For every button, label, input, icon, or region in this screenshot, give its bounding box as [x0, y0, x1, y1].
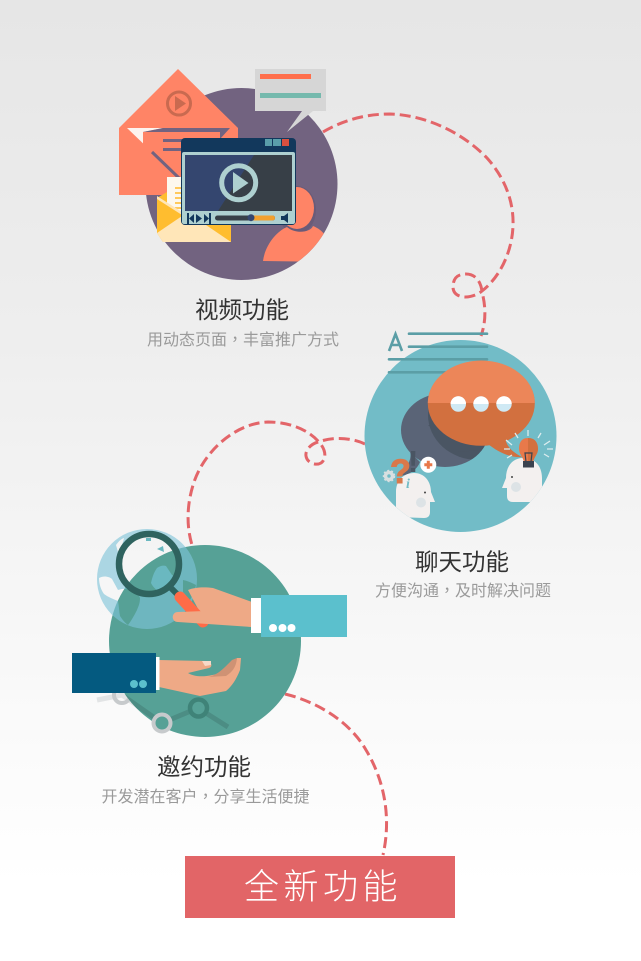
network graph behind — [97, 687, 162, 723]
icon: yellow envelope — [157, 177, 231, 242]
text: invitation description: 开发潜在客户，分享生活便捷 — [101, 783, 310, 807]
heading: invitation: 邀约功能 — [157, 754, 251, 780]
dashed path: video to chat — [323, 114, 513, 336]
teal circle — [364, 340, 556, 532]
icon: question and exclamation marks: ? — [390, 453, 411, 491]
green circle — [109, 545, 301, 737]
panel: chat feature — [364, 334, 556, 532]
icon: dark speech bubble — [401, 396, 485, 476]
heading: chat: 聊天功能 — [415, 549, 509, 575]
text: chat description: 方便沟通，及时解决问题 — [375, 577, 551, 601]
icon: orange speech bubble — [428, 360, 535, 457]
panel: invitation feature — [72, 529, 347, 737]
icon: left head — [396, 473, 435, 518]
icon: question and exclamation marks — [384, 444, 436, 492]
button: new features — [185, 856, 455, 918]
icon: lower hand with sleeve — [72, 653, 241, 696]
icon: upper hand with sleeve — [173, 587, 347, 637]
button: new features: 全新功能 — [244, 868, 402, 907]
icon: globe — [97, 529, 197, 629]
panel: video feature — [119, 69, 340, 280]
purple circle — [146, 88, 338, 280]
icon: coral envelope — [119, 69, 238, 195]
icon: video player window — [181, 138, 296, 225]
text: video description: 用动态页面，丰富推广方式 — [147, 326, 339, 350]
icon: question and exclamation marks: i — [406, 477, 410, 492]
heading: video: 视频功能 — [195, 297, 289, 323]
icon: text lines — [389, 334, 487, 372]
icon: magnifier — [119, 534, 180, 597]
dashed path: chat to invite — [188, 422, 365, 545]
icon: speech bubble — [255, 69, 326, 132]
dashed path: invite to button — [285, 694, 387, 855]
icon: person — [263, 187, 324, 262]
icon: question and exclamation marks: ! — [408, 444, 418, 479]
icon: right head with light bulb — [502, 430, 553, 502]
network nodes — [122, 695, 228, 732]
